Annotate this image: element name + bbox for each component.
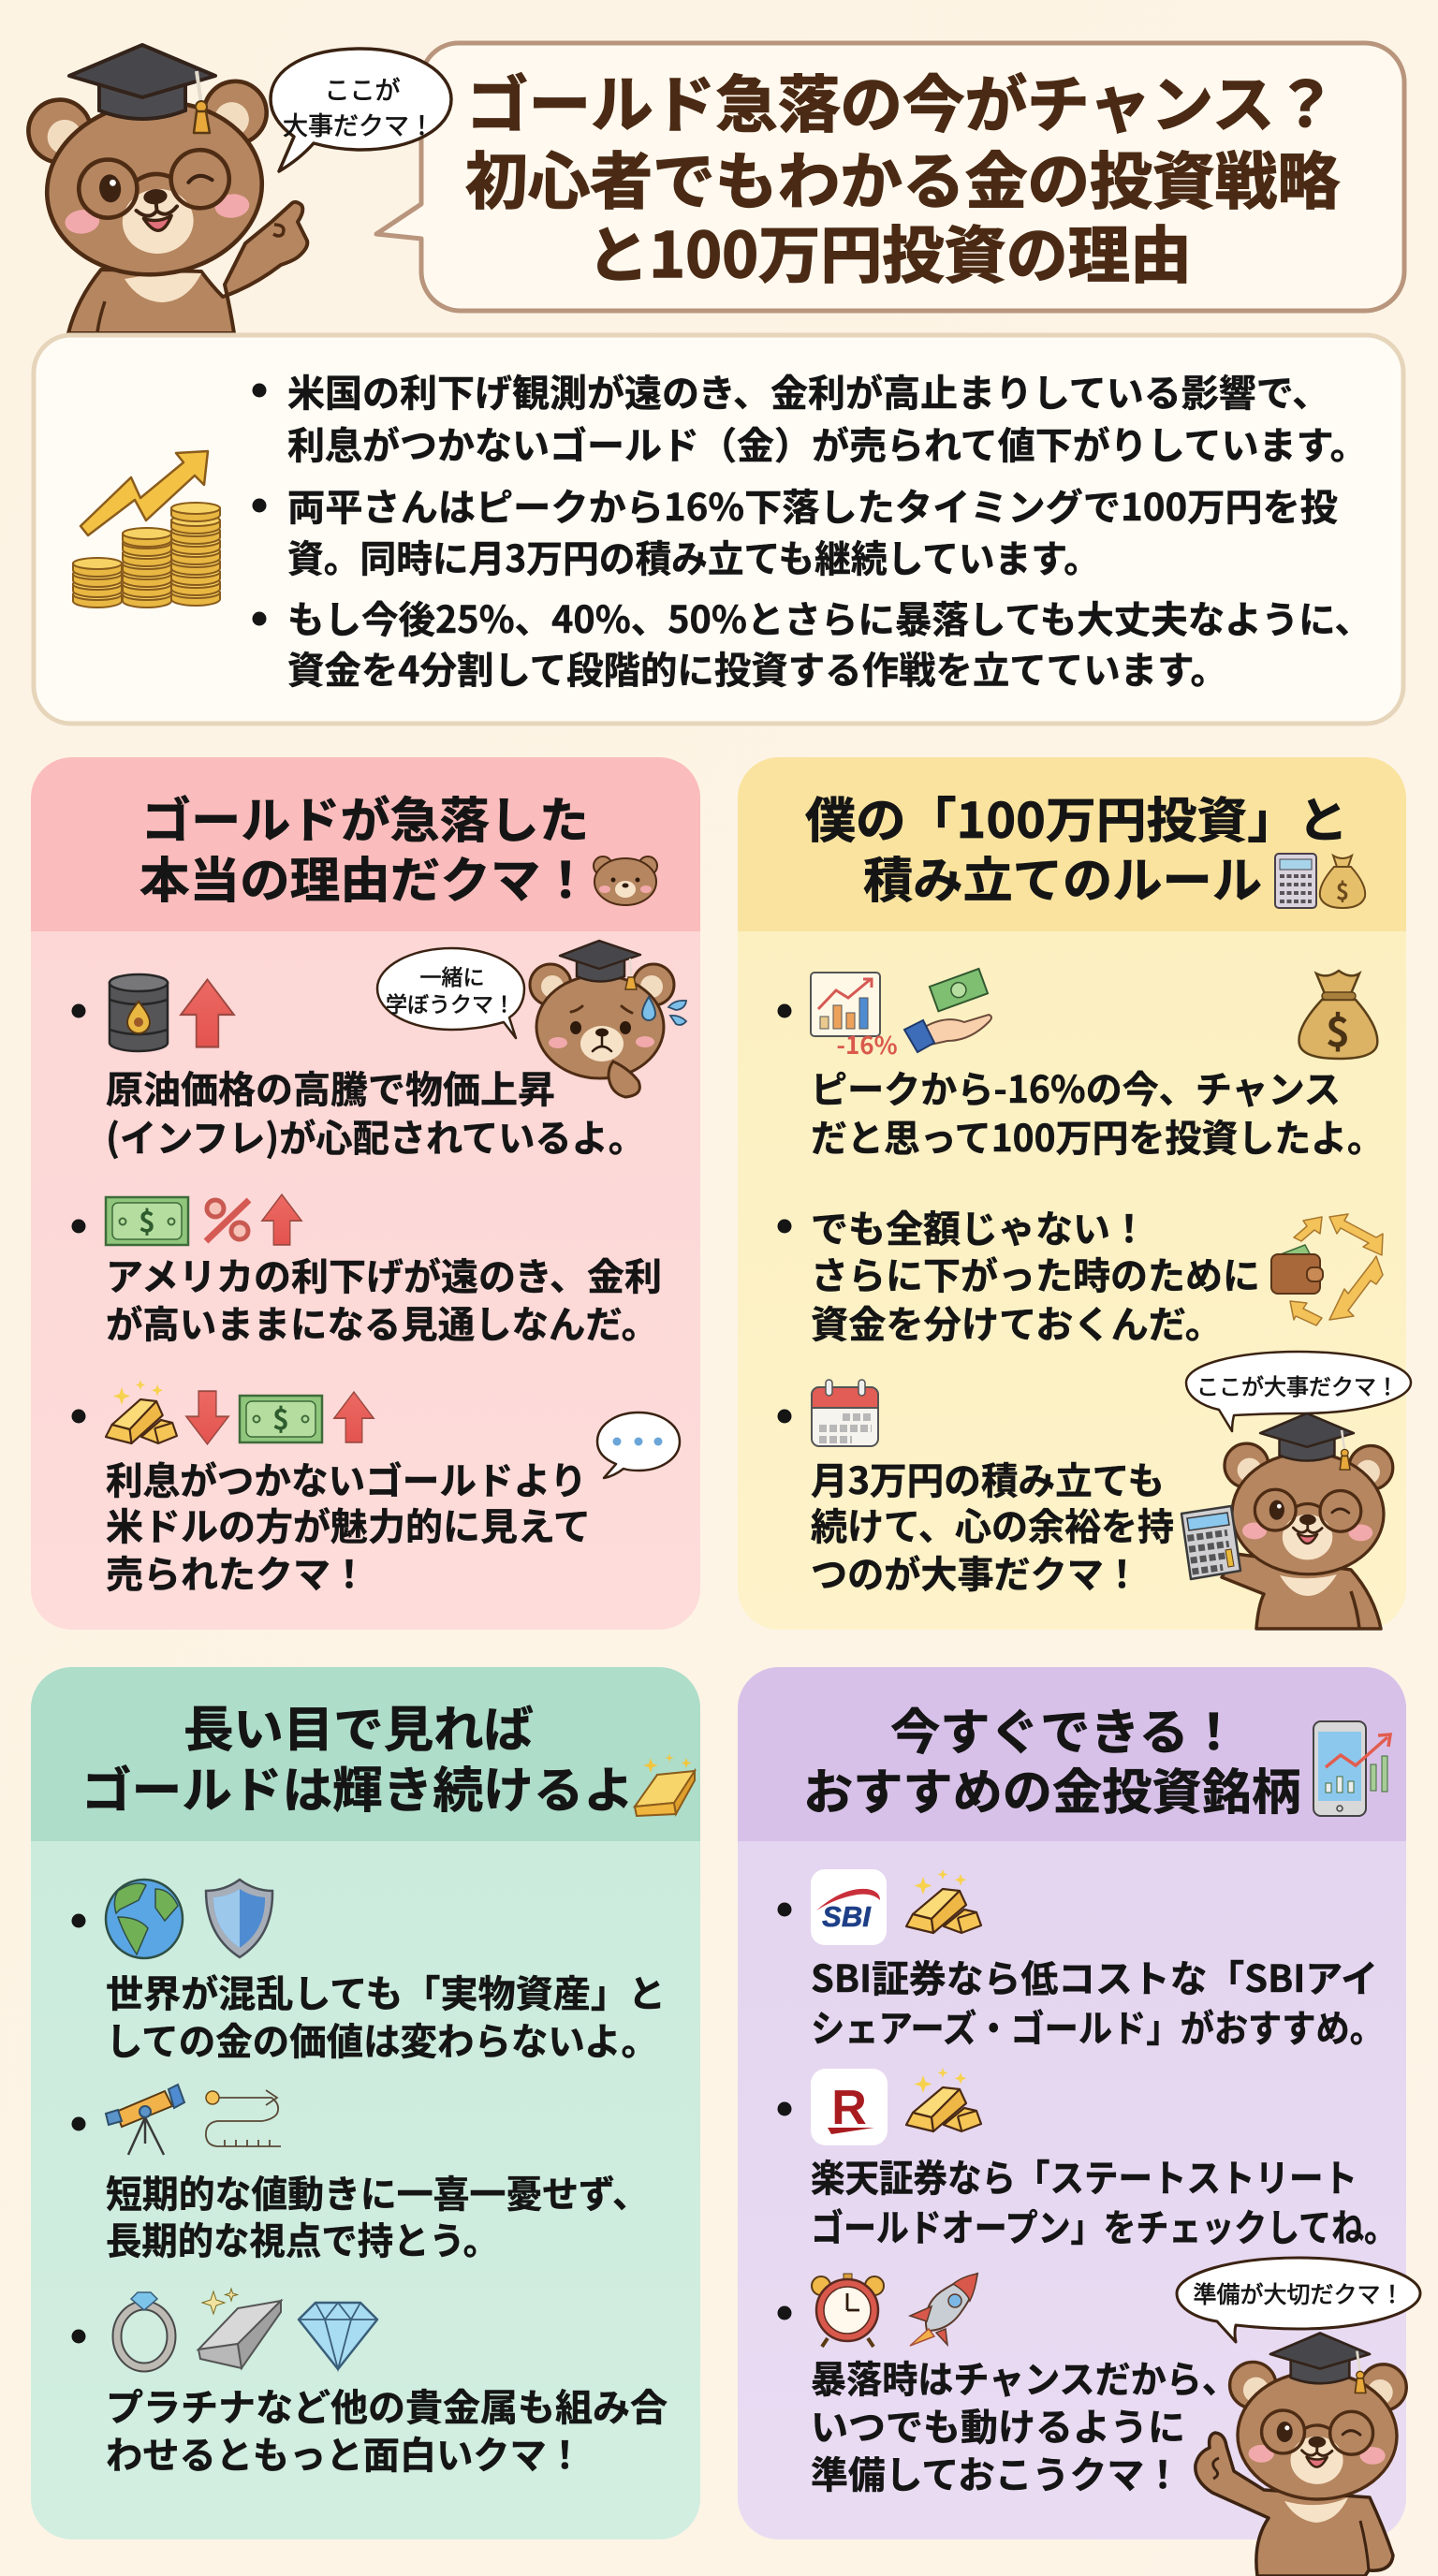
icon: dollar bill [106,1197,188,1245]
icon: rising arrow and coin stacks [73,451,220,607]
item 3 text [811,1451,1174,1599]
graduation cap [69,45,215,133]
heading [139,782,591,912]
bubble: ここが大事だクマ: ここが大事だクマ！ [1196,1368,1399,1401]
icon: calendar [812,1380,878,1446]
title text: ゴールド急落の今がチャンス？ [466,55,1337,145]
item 1 text: シェアーズ・ゴールド」がおすすめ。 [811,1998,1384,2053]
icon: gold bar [635,1753,695,1816]
summary bullets and text: 資。同時に月3万円の積み立ても継続しています。 [287,529,1100,583]
icon: dollar bill: $ [139,1199,155,1240]
icon: chart with -16%: -16% [836,1027,898,1061]
item 2 text: 長期的な視点で持とう。 [106,2211,499,2265]
item 2 text: 短期的な値動きに一喜一憂せず、 [106,2164,649,2218]
item 3 text: 準備しておこうクマ！ [811,2445,1181,2499]
graduation cap [1260,1413,1354,1470]
speech bubble: ここが大事だクマ [271,49,451,171]
panel: long term gold [31,1667,700,2539]
item 3 bullet [777,2306,792,2320]
bubble: 準備が大切だクマ [1177,2258,1420,2342]
bubble: ここが大事だクマ [1186,1352,1411,1431]
title text: と100万円投資の理由 [587,206,1192,296]
item 2 bullet [777,2102,792,2115]
summary bullets and text [253,363,1372,695]
mascot: bear with calculator [1181,1413,1393,1629]
graduation cap [1270,2334,1370,2393]
item 1 text [811,1060,1384,1163]
heading: 積み立てのルール [863,842,1262,912]
item 2 bullet [71,1219,86,1234]
item 1 bullet [71,1913,86,1928]
item 3 text: 暴落時はチャンスだから、 [811,2349,1238,2404]
icon: gold bars [906,1869,981,1933]
summary bullets and text: 利息がつかないゴールド（金）が売られて値下がりしています。 [287,416,1368,470]
summary bullets and text: 米国の利下げ観測が遠のき、金利が高止まりしている影響で、 [287,363,1329,417]
item 1 text: SBI証券なら低コストな「SBIアイ [811,1949,1378,2003]
heading: 僕の「100万円投資」と [805,782,1348,852]
icon: oil barrel [110,974,168,1051]
icon: up arrow [262,1194,301,1245]
icon: money bag [1299,971,1377,1059]
item 1 bullet [71,1003,86,1018]
heading [805,782,1348,912]
item 2 text [811,1199,1260,1349]
item 3 text: 売られたクマ！ [106,1544,368,1599]
calculator [1181,1506,1240,1579]
item 2 bullet [777,1219,792,1234]
title text: 初心者でもわかる金の投資戦略 [465,132,1340,222]
item 1 text [106,1060,645,1163]
icon: gold bars [106,1380,177,1443]
icon: calculator [1275,854,1316,908]
icon: telescope [106,2085,184,2155]
item 2 text: さらに下がった時のために [811,1246,1260,1300]
icon: dollar bill: $ [272,1397,289,1438]
item 3 text [106,2378,668,2480]
bear head [25,79,283,286]
heading [803,1693,1301,1823]
icon: money bag: $ [1326,999,1350,1059]
item 1 text: ピークから-16%の今、チャンス [811,1060,1341,1114]
icon: long timeline path [206,2090,281,2146]
panel: why gold fell [31,757,700,1630]
summary bullets and text: もし今後25%、40%、50%とさらに暴落しても大丈夫なように、 [287,590,1372,644]
icon: SBI logo [811,1869,887,1945]
item 2 text [106,1247,662,1349]
panel: 100万円 investment rules [738,757,1411,1630]
item 2 text [811,2148,1397,2252]
bubble: 一緒に学ぼうクマ: 学ぼうクマ！ [386,987,515,1018]
heading: ゴールドが急落した [141,782,589,852]
heading: 今すぐできる！ [890,1693,1239,1764]
item 3 text [106,1451,591,1599]
icon: chat bubble [597,1412,680,1478]
title panel [376,43,1404,311]
mascot: worried bear [530,941,686,1097]
bubble: 一緒に学ぼうクマ: 一緒に [419,959,485,991]
heading: おすすめの金投資銘柄 [803,1753,1301,1823]
item 3 bullet [777,1410,792,1423]
heading [81,1690,634,1822]
item 3 bullet [71,1410,86,1423]
icon: small bear [594,856,657,905]
panel header [738,1667,1406,1841]
icon: diamond [299,2303,377,2369]
item 3 text: わせるともっと面白いクマ！ [106,2425,583,2480]
item 3 text: 米ドルの方が魅力的に見えて [106,1497,591,1551]
mascot: bear pointing at title [25,45,307,333]
item 3 text: 利息がつかないゴールドより [106,1451,587,1505]
item 1 text: だと思って100万円を投資したよ。 [811,1108,1384,1163]
icon: platinum bar [198,2289,281,2368]
icon: Rakuten logo: R [831,2081,867,2135]
summary bullets and text: 資金を4分割して段階的に投資する作戦を立てています。 [287,640,1227,695]
icon: up arrow [334,1392,374,1442]
item 1 text: 世界が混乱しても「実物資産」と [106,1964,666,2018]
bear body [68,202,307,333]
icon: wallet with rotating arrows [1271,1214,1383,1325]
summary bullets and text: 両平さんはピークから16%下落したタイミングで100万円を投 [287,477,1338,532]
title text [465,55,1340,296]
panel header [31,757,700,931]
mascot: bear giving thumbs up [1196,2334,1407,2576]
item 2 text: が高いままになる見通しなんだ。 [106,1295,658,1349]
icon: SBI logo: SBI [822,1900,872,1933]
bear head [1227,2362,1407,2501]
item 2 text [106,2164,649,2265]
item 3 text [811,2349,1238,2499]
item 1 text: 原油価格の高騰で物価上昇 [106,1060,555,1114]
item 2 bullet [71,2117,86,2130]
icon: alarm clock [812,2274,884,2347]
speech bubble: ここが大事だクマ: ここが [324,70,401,107]
item 1 text: (インフレ)が心配されているよ。 [106,1108,645,1163]
bear body and arm [1196,2433,1393,2576]
item 1 bullet [777,1902,792,1917]
icon: phone with chart [1313,1721,1390,1816]
item 2 text: 楽天証券なら「ステートストリート [811,2148,1357,2203]
panel: recommended gold funds [738,1667,1420,2576]
item 1 text [811,1949,1384,2053]
bear head [1223,1443,1393,1575]
icon: shield [206,1880,272,1957]
bubble: 一緒に学ぼうクマ [377,948,524,1038]
icon: money bag small [1320,856,1365,908]
icon: globe [106,1880,183,1958]
item 1 bullet [777,1003,792,1018]
item 3 text: 続けて、心の余裕を持 [811,1497,1174,1551]
item 1 text: しての金の価値は変わらないよ。 [106,2012,658,2066]
icon: down arrow [186,1391,228,1444]
bear body [1222,1554,1381,1629]
heading: 長い目で見れば [183,1690,534,1761]
icon: up arrow [181,979,234,1046]
heading: ゴールドは輝き続けるよ [81,1751,634,1822]
speech bubble: ここが大事だクマ: 大事だクマ！ [283,106,434,142]
item 3 text: プラチナなど他の貴金属も組み合 [106,2378,668,2432]
item 3 text: 月3万円の積み立ても [811,1451,1165,1505]
icon: rocket [910,2274,977,2346]
item 2 text: 資金を分けておくんだ。 [811,1295,1223,1349]
summary panel [34,335,1403,724]
icon: money bag small: $ [1336,873,1349,906]
icon: Rakuten logo [811,2069,888,2145]
icon: chart with -16% [811,973,898,1061]
bubble: 準備が大切だクマ: 準備が大切だクマ！ [1193,2276,1404,2310]
panel header [31,1667,700,1841]
icon: hand offering cash [904,969,991,1052]
item 3 text: いつでも動けるように [811,2397,1185,2452]
icon: dollar bill [240,1396,322,1442]
item 2 text: でも全額じゃない！ [811,1199,1148,1253]
item 2 text: アメリカの利下げが遠のき、金利 [106,1247,662,1301]
item 3 text: つのが大事だクマ！ [811,1544,1140,1599]
icon: gold bars [906,2068,981,2131]
panel header [738,757,1406,931]
item 1 text [106,1964,666,2066]
item 3 bullet [71,2329,86,2344]
icon: diamond ring [117,2292,171,2367]
icon: percent sign [206,1200,249,1241]
heading: 本当の理由だクマ！ [139,842,591,912]
